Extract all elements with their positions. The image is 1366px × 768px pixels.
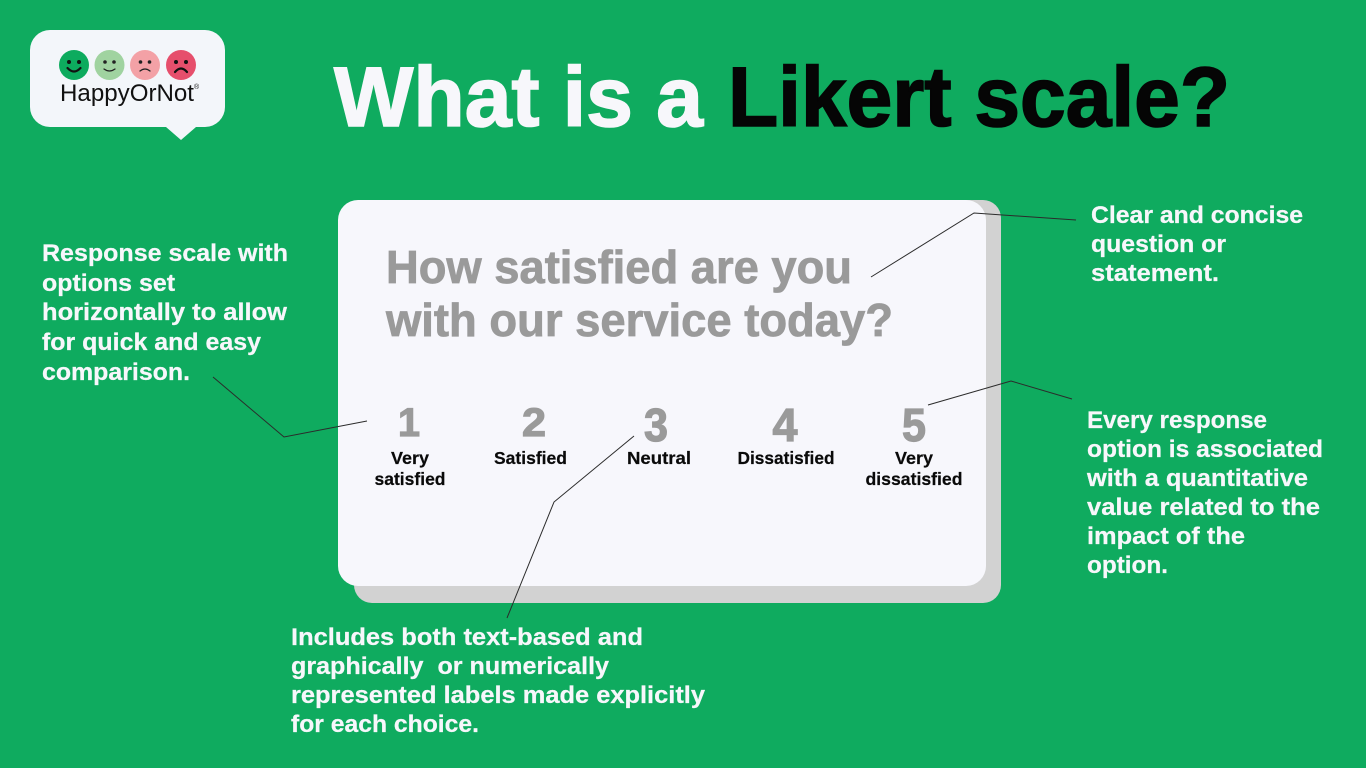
title: What is a (334, 50, 704, 144)
callout: labels: graphically or numerically (291, 653, 609, 680)
title: Likert scale? (728, 50, 1230, 144)
icon: unhappy face (130, 50, 160, 80)
logo wordmark: HappyOrNot (60, 80, 194, 107)
response option 5: Very (895, 448, 933, 468)
response option 5: 5 (902, 399, 926, 451)
icon: very happy face (59, 50, 89, 80)
callout: response scale (42, 240, 288, 386)
response option 1: Very (391, 448, 429, 468)
callout: clear question (1091, 202, 1303, 287)
callout: labels: Includes both text-based and (291, 624, 643, 651)
callout: quantitative value (1086, 407, 1323, 579)
callout: quantitative value: value related to the (1087, 494, 1320, 521)
callout: response scale: for quick and easy (42, 329, 261, 356)
survey question: How satisfied are you (386, 241, 852, 293)
response option 2 (494, 401, 567, 468)
callout: clear question: statement. (1091, 260, 1219, 287)
callout: response scale: horizontally to allow (42, 299, 288, 326)
arrow: leader to question (871, 213, 1076, 277)
callout: response scale: options set (42, 270, 175, 297)
callout: response scale: comparison. (42, 359, 190, 386)
icon: very unhappy face (166, 50, 196, 80)
card face (338, 200, 986, 586)
callout: clear question: Clear and concise (1091, 202, 1303, 229)
arrow: leader to response scale (213, 377, 367, 437)
logo: HappyOrNot speech bubble (30, 30, 225, 140)
arrow: leader to labels (507, 436, 634, 618)
response option 2: Satisfied (494, 448, 567, 468)
response option 1: satisfied (374, 469, 446, 489)
callout: quantitative value: option is associated (1087, 436, 1323, 463)
callout: quantitative value: with a quantitative (1086, 465, 1308, 492)
icon: happy face (94, 50, 124, 80)
response option 1 (374, 401, 446, 489)
panel: survey card (338, 200, 1001, 603)
response option 2: 2 (522, 401, 546, 445)
response option 5 (866, 399, 962, 489)
response option 3: 3 (644, 399, 668, 451)
card shadow (354, 200, 1001, 603)
response option 4: 4 (772, 399, 798, 451)
response option 3 (627, 399, 691, 468)
response option 4 (738, 399, 834, 468)
callout: quantitative value: impact of the (1087, 523, 1245, 550)
survey question: with our service today? (385, 294, 893, 346)
callout: response scale: Response scale with (42, 240, 288, 267)
response option 5: dissatisfied (866, 469, 962, 489)
arrow: leader to numeric value (928, 381, 1072, 405)
response option 3: Neutral (627, 448, 691, 468)
callout: labels: represented labels made explicitly (291, 682, 705, 709)
registered mark: ® (194, 83, 200, 91)
callout: labels: for each choice. (291, 711, 479, 738)
callout: labels (291, 624, 705, 738)
survey question (385, 241, 893, 346)
callout: quantitative value: option. (1087, 552, 1168, 579)
title (334, 50, 1230, 144)
callout: clear question: question or (1091, 231, 1226, 258)
response option 1: 1 (398, 401, 420, 445)
response option 4: Dissatisfied (738, 448, 834, 468)
callout: quantitative value: Every response (1087, 407, 1267, 434)
